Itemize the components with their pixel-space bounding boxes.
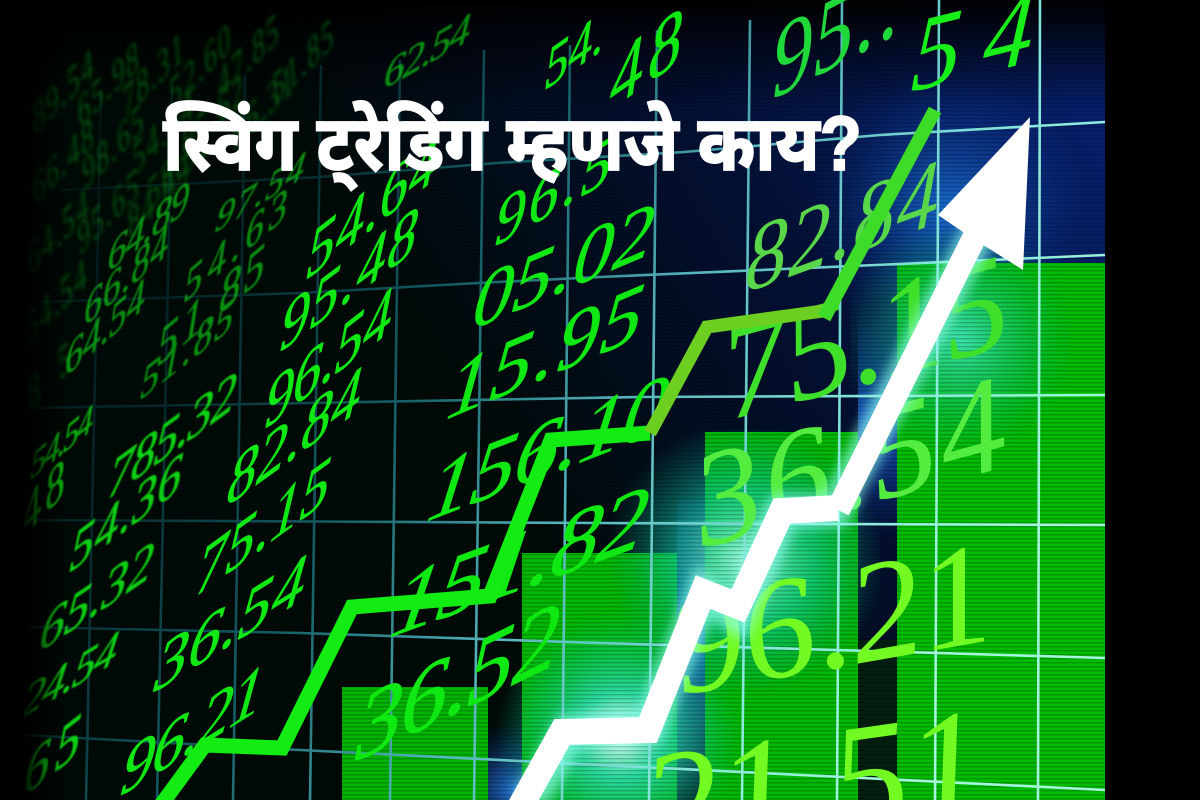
side vignette xyxy=(20,0,65,800)
mid dim numbers (left columns): 51.85 xyxy=(157,230,266,379)
far dim numbers (upper left): 98.65 xyxy=(79,94,147,200)
far dim numbers (upper left) xyxy=(22,4,337,420)
left column numbers: 24.54 xyxy=(17,619,123,731)
title: स्विंग ट्रेडिंग म्हणजे काय? xyxy=(163,101,862,191)
light glow behind arrow xyxy=(490,230,1070,800)
bright numbers (centre columns): 96.5 xyxy=(493,120,615,262)
green trend line xyxy=(150,110,935,800)
bright numbers (centre columns) xyxy=(117,0,683,800)
bright numbers (centre columns): 75.15 xyxy=(193,440,334,613)
bright numbers (centre columns): 54. xyxy=(545,0,605,103)
white arrow xyxy=(510,117,1030,800)
bright numbers (centre columns): 151.82 xyxy=(384,464,656,659)
left column numbers xyxy=(17,357,239,800)
far dim numbers (upper left): 52.60 xyxy=(166,14,234,120)
left column numbers: 785.32 xyxy=(106,357,239,513)
mid dim numbers (left columns): 54.63 xyxy=(184,177,288,314)
mid dim numbers (left columns): 97.54 xyxy=(212,142,309,243)
far dim numbers (upper left): 58.32 xyxy=(144,114,212,220)
far dim numbers (upper left): 47.85 xyxy=(214,4,282,110)
far dim numbers (upper left): 54.84 xyxy=(129,79,197,185)
far dim numbers (upper left): 65.98 xyxy=(74,32,142,138)
left column numbers: 54.54 xyxy=(30,394,94,489)
mid dim numbers (left columns): 51.85 xyxy=(139,288,235,411)
bright numbers (right columns): 36.54 xyxy=(681,347,1017,578)
far dim numbers (upper left): 64.54 xyxy=(24,179,92,285)
far dim numbers (upper left): 85.62 xyxy=(179,64,247,170)
bright numbers (centre columns): 82.84 xyxy=(224,350,365,523)
far dim numbers (upper left): 78.31 xyxy=(119,22,187,128)
bright numbers (right columns) xyxy=(631,0,1038,800)
far dim numbers (upper left): 84.89 xyxy=(124,144,192,250)
far dim numbers (upper left): 54.54 xyxy=(22,249,90,355)
bright numbers (right columns): 82.84 xyxy=(744,138,941,314)
far dim numbers (upper left): 66.48 xyxy=(29,109,97,215)
left column numbers: 54.36 xyxy=(68,438,185,586)
bright numbers (centre columns): 156.10 xyxy=(422,354,676,541)
far dim numbers (upper left): 51.85 xyxy=(269,9,337,115)
mid dim numbers (left columns): 64.89 xyxy=(106,170,191,284)
far dim numbers (upper left): 96.31 xyxy=(229,54,297,160)
bar chart: green volume bars xyxy=(342,263,1105,800)
bright numbers (centre columns): 05.02 xyxy=(469,184,659,347)
left column numbers: 65.32 xyxy=(36,527,157,666)
far dim numbers (upper left): 95.65 xyxy=(74,159,142,265)
left column numbers: 48 xyxy=(20,446,66,549)
mid dim numbers (left columns): 64.54 xyxy=(65,268,145,388)
mid dim numbers (left columns): 66.84 xyxy=(84,214,169,338)
bright numbers (centre columns): 36.52 xyxy=(353,579,563,784)
mid dim numbers (left columns) xyxy=(65,3,473,411)
bright numbers (centre columns): 15.95 xyxy=(443,264,649,438)
bright numbers (centre columns): 54.64 xyxy=(305,118,441,296)
bright numbers (right columns): 75.15 xyxy=(709,225,1020,450)
bright numbers (centre columns): 96.54 xyxy=(263,271,395,446)
mid dim numbers (left columns): 62.54 xyxy=(382,3,473,99)
bright numbers (centre columns): 95.48 xyxy=(278,190,420,369)
bright numbers (right columns): 96.21 xyxy=(658,513,1006,727)
far dim numbers (upper left): 89.54 xyxy=(29,39,97,145)
bright numbers (centre columns): 36.54 xyxy=(150,537,311,709)
far dim numbers (upper left): 85 xyxy=(24,332,74,420)
